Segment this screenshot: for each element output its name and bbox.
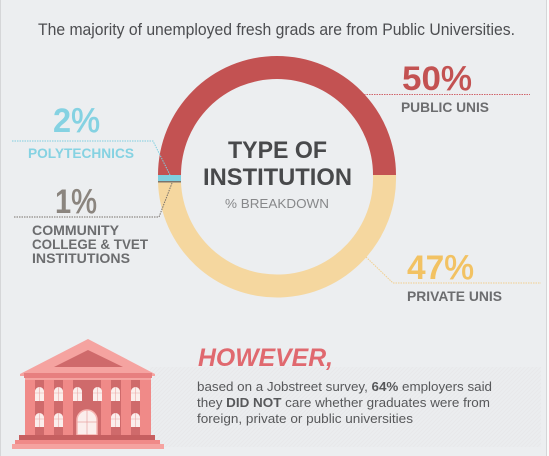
callout: polytechnics [12,102,170,175]
door [77,410,97,435]
donut centre label: TYPE OF [228,137,327,164]
callout: community college: INSTITUTIONS [32,250,130,266]
callout: community college: COLLEGE & TVET [32,236,148,252]
columns [25,380,151,435]
callout: private unis [366,249,541,304]
heading: however: HOWEVER, [198,344,333,372]
callout: community college: 1% [55,183,97,221]
segment: private unis 47% [158,175,396,298]
title: The majority of unemployed fresh grads are from Public Universities. [38,20,515,39]
roof [20,339,155,376]
callout: public unis [364,60,530,115]
body text [197,379,492,426]
segment: public unis 50% [158,56,396,175]
donut centre label: % BREAKDOWN [225,196,329,211]
segment: polytechnics 2% [158,175,181,181]
callout: public unis: 50% [402,60,472,98]
callout: public unis: PUBLIC UNIS [401,99,489,115]
body text: foreign, private or public universities [197,411,414,426]
callout: community college: COMMUNITY [32,222,120,238]
windows [35,387,140,427]
steps [19,435,155,440]
body text: they DID NOT care whether graduates were from [197,395,490,410]
callout: private unis: 47% [407,249,474,287]
building wall [35,380,141,435]
body text: based on a Jobstreet survey, 64% employers said [197,379,492,394]
donut centre label: INSTITUTION [203,164,352,191]
segment: community college 1% [158,181,181,182]
callout: polytechnics: POLYTECHNICS [28,145,134,161]
callout: community college [14,183,172,266]
donut centre label [203,137,352,211]
callout: polytechnics: 2% [53,102,100,140]
icon: university building [12,339,164,449]
donut chart [158,56,396,298]
callout: private unis: PRIVATE UNIS [407,288,502,304]
